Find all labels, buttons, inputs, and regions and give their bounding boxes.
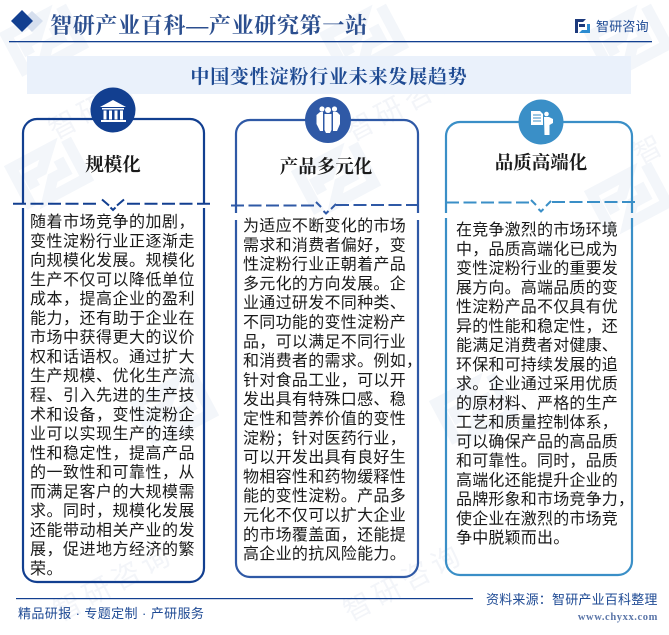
panel text: 为适应不断变化的市场: [243, 216, 406, 235]
footer tagline: 精品研报 · 专题定制 · 产研服务: [18, 606, 204, 621]
panel text: 争中脱颖而出。: [456, 529, 569, 547]
panel text: 在竞争激烈的市场环境: [456, 220, 618, 239]
panel text: 能的变性淀粉。产品多: [243, 487, 406, 505]
panel text: 性淀粉产品不仅具有优: [456, 298, 618, 316]
panel text: 高端化还能提升企业的: [456, 471, 618, 489]
panel text: 的市场覆盖面，还能提: [243, 526, 406, 544]
panel text: 展，促进地方经济的繁: [30, 541, 195, 559]
panel: 产品多元化: [231, 97, 427, 577]
panel: 品质高端化: [446, 100, 639, 575]
panel heading: 产品多元化: [280, 157, 372, 178]
source url: www.chyxx.com: [578, 612, 658, 623]
header icon: diamonds: [11, 10, 43, 32]
panel text: 的原材料、严格的生产: [456, 394, 618, 412]
panel text: 性和稳定性，提高产品: [30, 444, 195, 462]
panel text: 能满足消费者对健康、: [456, 336, 618, 354]
panel text: 不同功能的变性淀粉产: [243, 314, 406, 332]
panel text: 业通过研发不同种类、: [243, 294, 406, 312]
footer rule: [16, 598, 473, 599]
panel text: 变性淀粉行业的重要发: [456, 260, 618, 278]
panel text: 品牌形象和市场竞争力，: [456, 490, 634, 508]
panel text: 求。同时，规模化发展: [30, 502, 195, 520]
panel: 规模化: [13, 88, 214, 582]
panel text: 和可靠性。同时，品质: [456, 452, 618, 470]
watermark pattern: 智研咨询: [48, 538, 179, 627]
panel text: 工艺和质量控制体系，: [456, 414, 618, 432]
panel text: 市场中获得更大的议价: [30, 329, 195, 347]
panel text: 而满足客户的大规模需: [30, 483, 195, 501]
panel text: 高企业的抗风险能力。: [243, 545, 406, 563]
panel text: 针对食品工业，可以开: [243, 371, 406, 389]
panel text: 需求和消费者偏好，变: [243, 236, 406, 254]
panel text: 和消费者的需求。例如，: [243, 352, 422, 370]
panel text: 性淀粉行业正朝着产品: [243, 256, 406, 274]
panel text: 使企业在激烈的市场竞: [456, 510, 618, 528]
icon: document and person: [518, 100, 564, 144]
watermark pattern: 智研咨询: [338, 538, 469, 627]
panel text: 能力，还有助于企业在: [30, 309, 195, 327]
panel text: 可以确保产品的高品质: [456, 433, 618, 451]
watermark pattern: 智研咨询: [43, 56, 174, 145]
header title: 智研产业百科—产业研究第一站: [50, 13, 368, 38]
panel text: 成本，提高企业的盈利: [30, 290, 195, 308]
panel text: 变性淀粉行业正逐渐走: [30, 232, 195, 250]
panel text: 生产不仅可以降低单位: [30, 271, 195, 289]
panel text: 随着市场竞争的加剧，: [30, 213, 195, 231]
panel text: 淀粉；针对医药行业，: [243, 429, 406, 447]
panel text: 物相容性和药物缓释性: [243, 468, 406, 486]
panel heading: 品质高端化: [495, 152, 587, 174]
panel text: 向规模化发展。规模化: [30, 252, 195, 270]
panel text: 的一致性和可靠性，从: [30, 464, 195, 482]
panel text: 异的性能和稳定性，还: [456, 317, 618, 335]
source note: 资料来源：智研产业百科整理: [486, 592, 658, 607]
panel text: 中，品质高端化已成为: [456, 240, 618, 258]
panel text: 多元化的方向发展。企: [243, 275, 406, 293]
panel text: 还能带动相关产业的发: [30, 521, 195, 539]
divider with notch: [13, 200, 214, 210]
divider with notch: [231, 202, 422, 214]
panel heading: 规模化: [85, 155, 141, 176]
panel text: 定性和营养价值的变性: [243, 410, 406, 428]
banner: 中国变性淀粉行业未来发展趋势: [190, 65, 468, 88]
icon: bank: [90, 88, 136, 132]
panel text: 荣。: [30, 560, 63, 578]
panel text: 品，可以满足不同行业: [243, 333, 406, 351]
panel text: 求。企业通过采用优质: [456, 375, 618, 393]
watermark pattern: 智研咨询: [340, 58, 471, 147]
panel text: 程、引入先进的生产技: [30, 386, 195, 404]
panel text: 环保和可持续发展的追: [456, 356, 618, 374]
panel text: 生产规模、优化生产流: [30, 367, 195, 385]
panel text: 展方向。高端品质的变: [456, 279, 618, 297]
header rule: [9, 41, 652, 42]
panel text: 业可以实现生产的连续: [30, 425, 195, 443]
panel text: 发出具有特殊口感、稳: [243, 391, 406, 409]
icon: people: [305, 97, 351, 143]
banner: [27, 56, 631, 94]
panel text: 可以开发出具有良好生: [243, 449, 406, 467]
panel text: 术和设备，变性淀粉企: [30, 406, 195, 424]
divider with notch: [446, 200, 639, 212]
panel text: 权和话语权。通过扩大: [30, 348, 195, 366]
panel text: 元化不仅可以扩大企业: [243, 506, 406, 524]
logo: zhiyan consulting: 智研咨询: [596, 19, 649, 34]
